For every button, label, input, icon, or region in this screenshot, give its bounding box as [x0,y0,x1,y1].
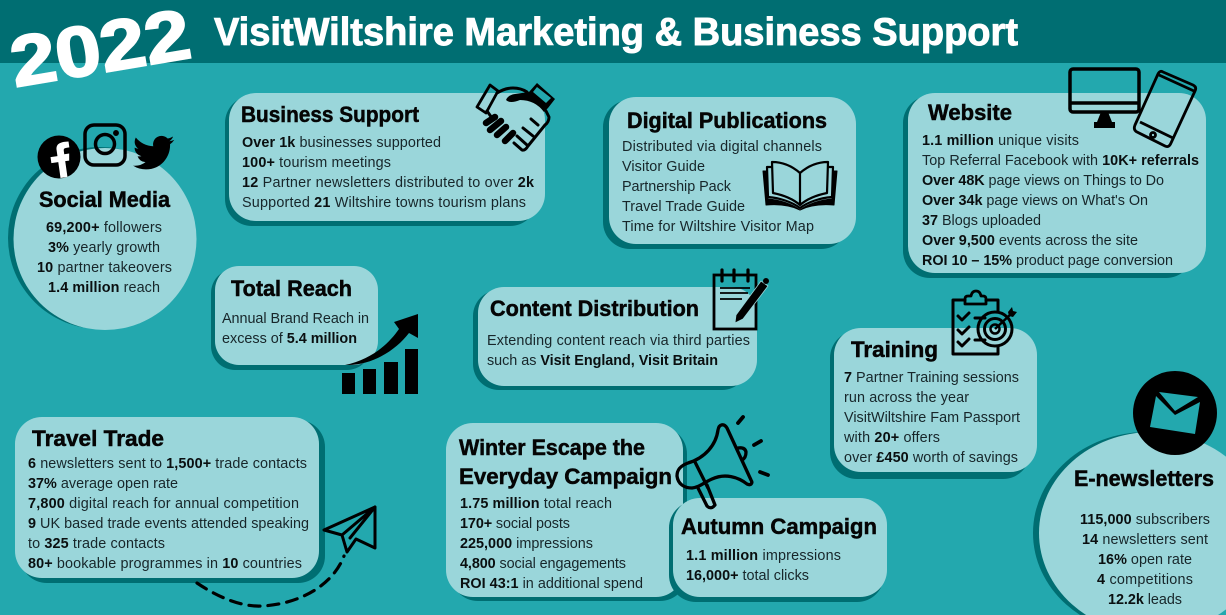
website stats [922,133,1199,269]
e-newsletters stats: 115,000 subscribers [1080,512,1210,528]
travel trade stats [28,456,309,572]
travel trade stats: 7,800 digital reach for annual competition [28,496,299,512]
panel: winter escape the everyday campaign [446,423,687,601]
panel: e-newsletters [1033,371,1226,615]
icon: open book [763,162,837,210]
panel: digital publications [603,97,856,249]
social media stats: 10 partner takeovers [37,260,172,276]
heading: winter escape: Winter Escape the [459,435,645,460]
panel: autumn campaign [669,498,887,602]
winter campaign stats: 225,000 impressions [460,536,593,552]
training stats [843,370,1020,466]
icon: paper plane [324,507,375,552]
icon: smartphone [1134,71,1196,147]
website stats: Over 9,500 events across the site [922,233,1138,249]
content distribution text: Extending content reach via third parties [487,333,750,349]
autumn campaign stats: 16,000+ total clicks [686,568,809,584]
website stats: Over 48K page views on Things to Do [922,173,1164,189]
digital publications list: Travel Trade Guide [622,199,745,215]
website stats: Over 34k page views on What's On [922,193,1148,209]
winter campaign stats: ROI 43:1 in additional spend [460,576,643,592]
heading: social media: Social Media [39,187,170,212]
digital publications list: Time for Wiltshire Visitor Map [622,219,814,235]
e-newsletters stats [1080,512,1210,608]
icon: megaphone [677,417,768,508]
business support stats [242,135,535,211]
digital publications list [622,139,822,235]
e-newsletters stats: 4 competitions [1097,572,1193,588]
icon: clipboard and target [953,291,1017,354]
heading: website: Website [928,100,1012,125]
total reach text: Annual Brand Reach in [222,311,369,327]
total reach text: excess of 5.4 million [222,331,357,347]
social media stats: 1.4 million reach [48,280,160,296]
heading: autumn campaign: Autumn Campaign [681,514,877,539]
travel trade stats: 37% average open rate [28,476,178,492]
website stats: Top Referral Facebook with 10K+ referrals [922,153,1199,169]
panel: website [903,69,1206,278]
business support stats: Over 1k businesses supported [242,135,441,151]
panel: training [830,291,1037,479]
year 2022: 2022 [5,0,196,103]
title: VisitWiltshire Marketing & Business Support [214,11,1018,54]
website stats: 37 Blogs uploaded [922,213,1041,229]
e-newsletters stats: 14 newsletters sent [1082,532,1208,548]
social media stats [37,220,172,296]
heading: winter escape: Everyday Campaign [459,464,672,489]
heading: winter escape [459,435,672,489]
icon: facebook [38,136,80,179]
panel: content distribution [473,270,769,390]
heading: total reach: Total Reach [231,276,352,301]
e-newsletters stats: 16% open rate [1098,552,1192,568]
travel trade stats: 80+ bookable programmes in 10 countries [28,556,302,572]
training stats: over £450 worth of savings [844,450,1018,466]
social media stats: 69,200+ followers [46,220,162,236]
travel trade stats: 6 newsletters sent to 1,500+ trade contacts [28,456,307,472]
winter campaign stats: 1.75 million total reach [460,496,612,512]
e-newsletters stats: 12.2k leads [1108,592,1182,608]
content distribution text [487,333,750,369]
icon: notepad and pencil [714,270,769,329]
icon: envelope [1133,371,1217,455]
icon: twitter [133,136,174,169]
icon: instagram [85,125,125,165]
business support stats: 12 Partner newsletters distributed to over 2k [242,175,535,191]
winter campaign stats: 170+ social posts [460,516,570,532]
digital publications list: Visitor Guide [622,159,705,175]
icon: desktop monitor [1070,69,1139,128]
business support stats: Supported 21 Wiltshire towns tourism plans [242,195,526,211]
digital publications list: Partnership Pack [622,179,732,195]
training stats: 7 Partner Training sessions [844,370,1019,386]
website stats: ROI 10 – 15% product page conversion [922,253,1173,269]
panel: business support [225,83,555,226]
icon: handshake [477,83,555,150]
website stats: 1.1 million unique visits [922,133,1079,149]
training stats: with 20+ offers [843,430,940,446]
travel trade stats: to 325 trade contacts [28,536,165,552]
travel trade stats: 9 UK based trade events attended speaking [28,516,309,532]
autumn campaign stats: 1.1 million impressions [686,548,841,564]
business support stats: 100+ tourism meetings [242,155,391,171]
autumn campaign stats [686,548,841,584]
heading: travel trade: Travel Trade [32,426,164,451]
header banner [0,0,1226,63]
heading: content distribution: Content Distribution [490,296,699,321]
panel: total reach [211,266,418,394]
panel: travel trade [15,417,325,583]
digital publications list: Distributed via digital channels [622,139,822,155]
heading: business support: Business Support [241,102,419,127]
social media stats: 3% yearly growth [48,240,160,256]
heading: training: Training [851,337,938,362]
content distribution text: such as Visit England, Visit Britain [487,353,718,369]
winter campaign stats: 4,800 social engagements [460,556,626,572]
training stats: run across the year [844,390,969,406]
training stats: VisitWiltshire Fam Passport [844,410,1020,426]
winter campaign stats [460,496,643,592]
heading: digital publications: Digital Publications [627,108,827,133]
arrow: dashed flight path [197,556,344,606]
panel: social media [8,125,196,330]
icon: growth chart [342,314,418,394]
total reach text [222,311,369,347]
heading: e-newsletters: E-newsletters [1074,466,1214,491]
